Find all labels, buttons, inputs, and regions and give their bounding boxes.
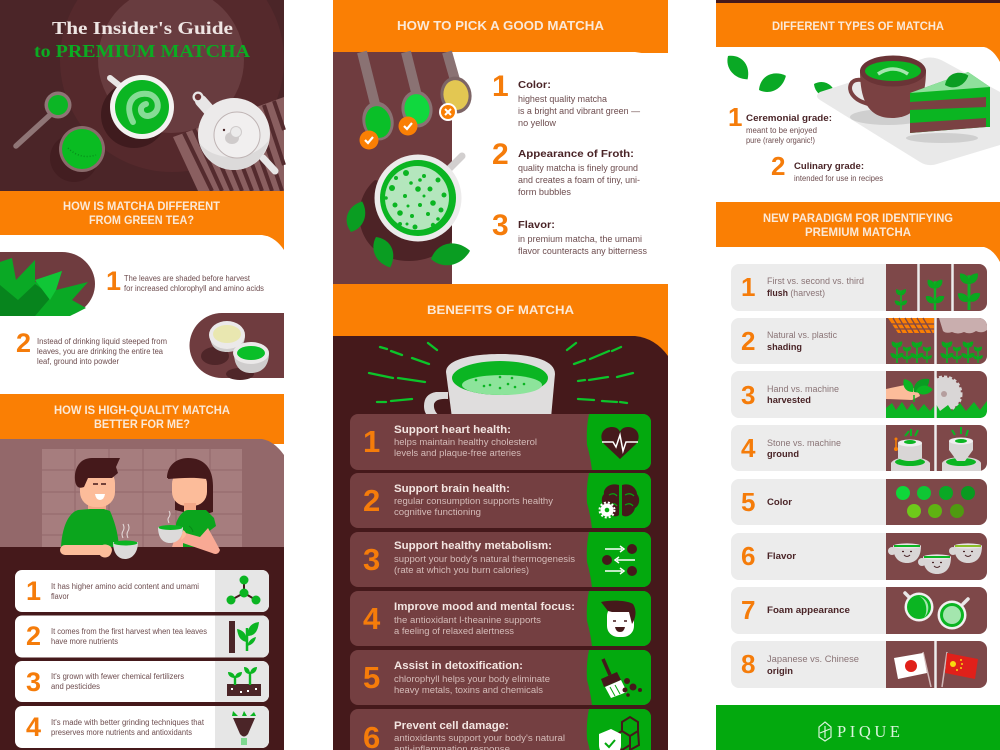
icon: three growth stages	[893, 271, 982, 310]
card: detoxification: Assist in detoxification:	[394, 660, 523, 672]
icon: color swatches	[896, 486, 975, 518]
icon: matcha layer cake	[906, 69, 990, 143]
card: amino acids: flavor	[51, 592, 69, 601]
card: fewer chemicals	[15, 661, 269, 702]
heading: different types of matcha	[716, 3, 1000, 63]
icon: soil and seedlings	[227, 667, 261, 696]
text: ceremonial grade: 1	[728, 102, 742, 132]
icon: Pique leaf logo	[819, 722, 831, 741]
row: harvested: Hand vs. machine	[767, 384, 839, 394]
text: point 1: 1	[106, 266, 121, 296]
text: culinary grade	[771, 151, 883, 183]
row: origin: 8	[741, 649, 755, 679]
title: to PREMIUM MATCHA	[34, 41, 250, 61]
text: ceremonial grade	[728, 102, 832, 145]
icon: frothy matcha cup	[359, 154, 462, 261]
heading: how is matcha different: HOW IS MATCHA DIFFERENT	[63, 201, 220, 213]
icon: loose leaves	[722, 50, 839, 102]
icon: two tea bowls	[190, 313, 284, 380]
illustration: two friends drinking matcha	[0, 439, 284, 561]
icon: plate	[817, 58, 1000, 165]
panel: matcha versus green tea	[0, 235, 284, 394]
text: point 2	[16, 328, 167, 366]
card: heart health: Support heart health:	[394, 424, 511, 436]
top strip of right column	[716, 0, 1000, 3]
text: point 2: leaf, ground into powder	[37, 357, 119, 366]
card: grinding techniques: preserves more nutrients and antioxidants	[51, 728, 192, 737]
row: flush: First vs. second vs. third	[767, 276, 864, 286]
text: color: Color:	[518, 79, 551, 91]
icon: smiling face	[601, 601, 636, 637]
row: flavor: 6	[741, 541, 755, 571]
card: heart health: levels and plaque-free arteries	[394, 448, 522, 458]
text: froth: quality matcha is finely ground	[518, 163, 638, 173]
character: man	[60, 458, 138, 559]
row: color	[731, 479, 987, 525]
heading: different types of matcha: DIFFERENT TYPES OF MATCHA	[772, 21, 944, 33]
card: metabolism	[350, 532, 651, 587]
icon: leaves	[342, 198, 472, 271]
card: grinding techniques	[15, 706, 269, 748]
card: first harvest: have more nutrients	[51, 637, 118, 646]
icon: man's cup	[113, 524, 138, 559]
icon: broom and dust	[601, 659, 642, 698]
row: flush: 1	[741, 272, 755, 302]
heading: benefits of matcha: BENEFITS OF MATCHA	[427, 303, 574, 317]
card: brain health: regular consumption supports healthy	[394, 496, 554, 506]
heading: benefits of matcha	[333, 284, 668, 356]
heading: new paradigm: PREMIUM MATCHA	[805, 227, 911, 239]
panel: how to pick	[333, 52, 668, 284]
card: metabolism: support your body's natural thermogenesis	[394, 554, 576, 564]
icon: heart rate	[601, 427, 639, 459]
card: mood and focus	[350, 591, 651, 646]
text: ceremonial grade: pure (rarely organic!)	[746, 136, 815, 145]
heading: new paradigm	[716, 202, 1000, 262]
card: detoxification: 5	[363, 660, 380, 695]
text: point 1: for increased chlorophyll and amino acids	[124, 284, 264, 293]
icon: metabolism arrows	[602, 544, 637, 576]
card: amino acids: It has higher amino acid content and umami	[51, 582, 199, 591]
icon: ruler and sprout	[229, 621, 259, 653]
card: detoxification: heavy metals, toxins and chemicals	[394, 685, 544, 695]
text: ceremonial grade: meant to be enjoyed	[746, 126, 817, 135]
icon: white teapot	[192, 92, 275, 171]
text: ceremonial grade: Ceremonial grade:	[746, 113, 832, 124]
row: foam	[731, 587, 987, 634]
panel: types of matcha	[716, 47, 1000, 202]
heading: new paradigm: NEW PARADIGM FOR IDENTIFYING	[763, 213, 953, 225]
card: metabolism: 3	[363, 542, 380, 577]
row: flush	[731, 264, 987, 311]
card: amino acids: 1	[26, 576, 41, 606]
text: point 1	[106, 266, 264, 296]
card: brain health: cognitive functioning	[394, 507, 481, 517]
card: detoxification: chlorophyll helps your body eliminate	[394, 674, 550, 684]
text: froth: and creates a foam of tiny, uni-	[518, 175, 640, 185]
text: flavor: Flavor:	[518, 219, 555, 231]
text: froth: 2	[492, 138, 509, 171]
row: origin	[731, 641, 987, 688]
text: color: highest quality matcha	[518, 94, 607, 104]
footer: Pique brand: PIQUE	[837, 722, 900, 741]
row: shading: Natural vs. plastic	[767, 330, 838, 340]
icon: shield and hexagons	[599, 717, 639, 750]
card: first harvest: 2	[26, 621, 41, 651]
text: point 2: 2	[16, 328, 31, 358]
text: color	[492, 70, 640, 128]
card: first harvest	[15, 616, 269, 658]
icon: flag of China	[942, 652, 978, 687]
row: shading	[731, 318, 987, 364]
icon: cup of matcha with swirl	[101, 75, 174, 148]
icon: stone and machine grinders	[891, 427, 981, 471]
icon: brain with gear	[600, 484, 639, 518]
icon: flag of Japan	[894, 652, 931, 687]
row: color: Color	[767, 497, 793, 507]
icon: grinding funnel	[232, 711, 256, 745]
icon: bamboo mat	[173, 97, 284, 191]
text: color: no yellow	[518, 118, 557, 128]
card: brain health: 2	[363, 483, 380, 518]
card: mood and focus: a feeling of relaxed alertness	[394, 626, 515, 636]
card: grinding techniques: 4	[26, 712, 41, 742]
text: froth: Appearance of Froth:	[518, 148, 634, 160]
decoration: green rays	[369, 343, 633, 403]
panel: left column header	[0, 0, 284, 191]
card: detoxification	[350, 650, 651, 705]
heading: how is high-quality matcha: BETTER FOR ME?	[94, 419, 190, 431]
icon: brown cup of matcha	[850, 56, 926, 125]
card: grinding techniques: It's made with better grinding techniques that	[51, 718, 205, 727]
icon: bowl of matcha powder	[50, 126, 105, 182]
row: flavor	[731, 533, 987, 580]
icon: shaded tea leaves	[0, 252, 95, 316]
row: origin: origin	[767, 666, 793, 676]
icon: spoons with check and cross	[359, 52, 474, 150]
card: heart health: 1	[363, 424, 380, 459]
title: The Insider's Guide	[52, 18, 233, 38]
text: froth: form bubbles	[518, 187, 572, 197]
row: foam: Foam appearance	[767, 605, 850, 615]
text: froth	[492, 138, 640, 197]
text: culinary grade: intended for use in recipes	[794, 174, 883, 183]
heading: how to pick a good matcha	[333, 0, 668, 53]
title	[34, 18, 250, 61]
text: flavor: in premium matcha, the umami	[518, 234, 642, 244]
icon: molecule	[226, 576, 260, 604]
card: first harvest: It comes from the first harvest when tea leaves	[51, 627, 207, 636]
card: cell damage: Prevent cell damage:	[394, 720, 509, 732]
text: culinary grade: Culinary grade:	[794, 161, 864, 172]
text: point 2: leaves, you are drinking the entire tea	[37, 347, 164, 356]
card: amino acids	[15, 570, 269, 612]
row: ground: ground	[767, 449, 799, 459]
text: point 2: Instead of drinking liquid steeped from	[37, 337, 167, 346]
card: heart health	[350, 414, 651, 470]
row: foam: 7	[741, 595, 755, 625]
card: cell damage: antioxidants support your body's natural	[394, 733, 565, 743]
heading: how to pick a good matcha: HOW TO PICK A GOOD MATCHA	[397, 19, 604, 33]
row: harvested: 3	[741, 380, 755, 410]
row: ground: 4	[741, 433, 756, 463]
row: color: 5	[741, 487, 755, 517]
text: point 1: The leaves are shaded before harvest	[124, 274, 251, 283]
card: mood and focus: the antioxidant l-theanine supports	[394, 615, 542, 625]
icon: matcha spoon	[16, 92, 72, 146]
footer: Pique brand	[716, 705, 1000, 750]
heading: how is matcha different: FROM GREEN TEA?	[89, 215, 194, 227]
icon: three tasting cups	[888, 543, 982, 574]
card: mood and focus: Improve mood and mental focus:	[394, 601, 575, 613]
row: shading: shading	[767, 342, 802, 352]
text: culinary grade: 2	[771, 151, 785, 181]
character: woman	[158, 458, 220, 554]
text: color: 1	[492, 70, 509, 103]
icon: natural and plastic shade	[888, 318, 987, 363]
card: fewer chemicals: It's grown with fewer chemical fertilizers	[51, 672, 184, 681]
card: brain health: Support brain health:	[394, 483, 510, 495]
icon: foam comparison cups	[904, 592, 968, 630]
heading: how is high-quality matcha	[0, 394, 284, 444]
heading: how is high-quality matcha: HOW IS HIGH-QUALITY MATCHA	[54, 405, 230, 417]
row: ground	[731, 425, 987, 471]
card: cell damage	[350, 709, 651, 750]
card: brain health	[350, 473, 651, 528]
card: fewer chemicals: and pesticides	[51, 682, 100, 691]
panel: benefits	[333, 336, 668, 750]
card: mood and focus: 4	[363, 601, 381, 636]
icon: hand and machine harvest	[886, 371, 987, 418]
text: flavor: flavor counteracts any bitterness	[518, 246, 648, 256]
heading: how is matcha different	[0, 191, 284, 236]
row: shading: 2	[741, 326, 755, 356]
row: harvested: harvested	[767, 395, 811, 405]
text: flavor	[492, 209, 648, 256]
row: flush: flush (harvest)	[767, 288, 825, 298]
card: heart health: helps maintain healthy cholesterol	[394, 437, 537, 447]
row: harvested	[731, 371, 987, 418]
icon: woman's cup	[158, 511, 183, 543]
card: metabolism: (rate at which you burn calories)	[394, 565, 529, 575]
panel: paradigm list	[716, 247, 1000, 705]
card: metabolism: Support healthy metabolism:	[394, 540, 552, 552]
row: flavor: Flavor	[767, 551, 797, 561]
text: color: is a bright and vibrant green —	[518, 106, 640, 116]
card: fewer chemicals: 3	[26, 667, 41, 697]
text: flavor: 3	[492, 209, 509, 242]
icon: big matcha mug	[424, 354, 555, 418]
row: ground: Stone vs. machine	[767, 438, 841, 448]
row: origin: Japanese vs. Chinese	[767, 654, 859, 664]
panel: matcha quality list	[0, 561, 284, 750]
